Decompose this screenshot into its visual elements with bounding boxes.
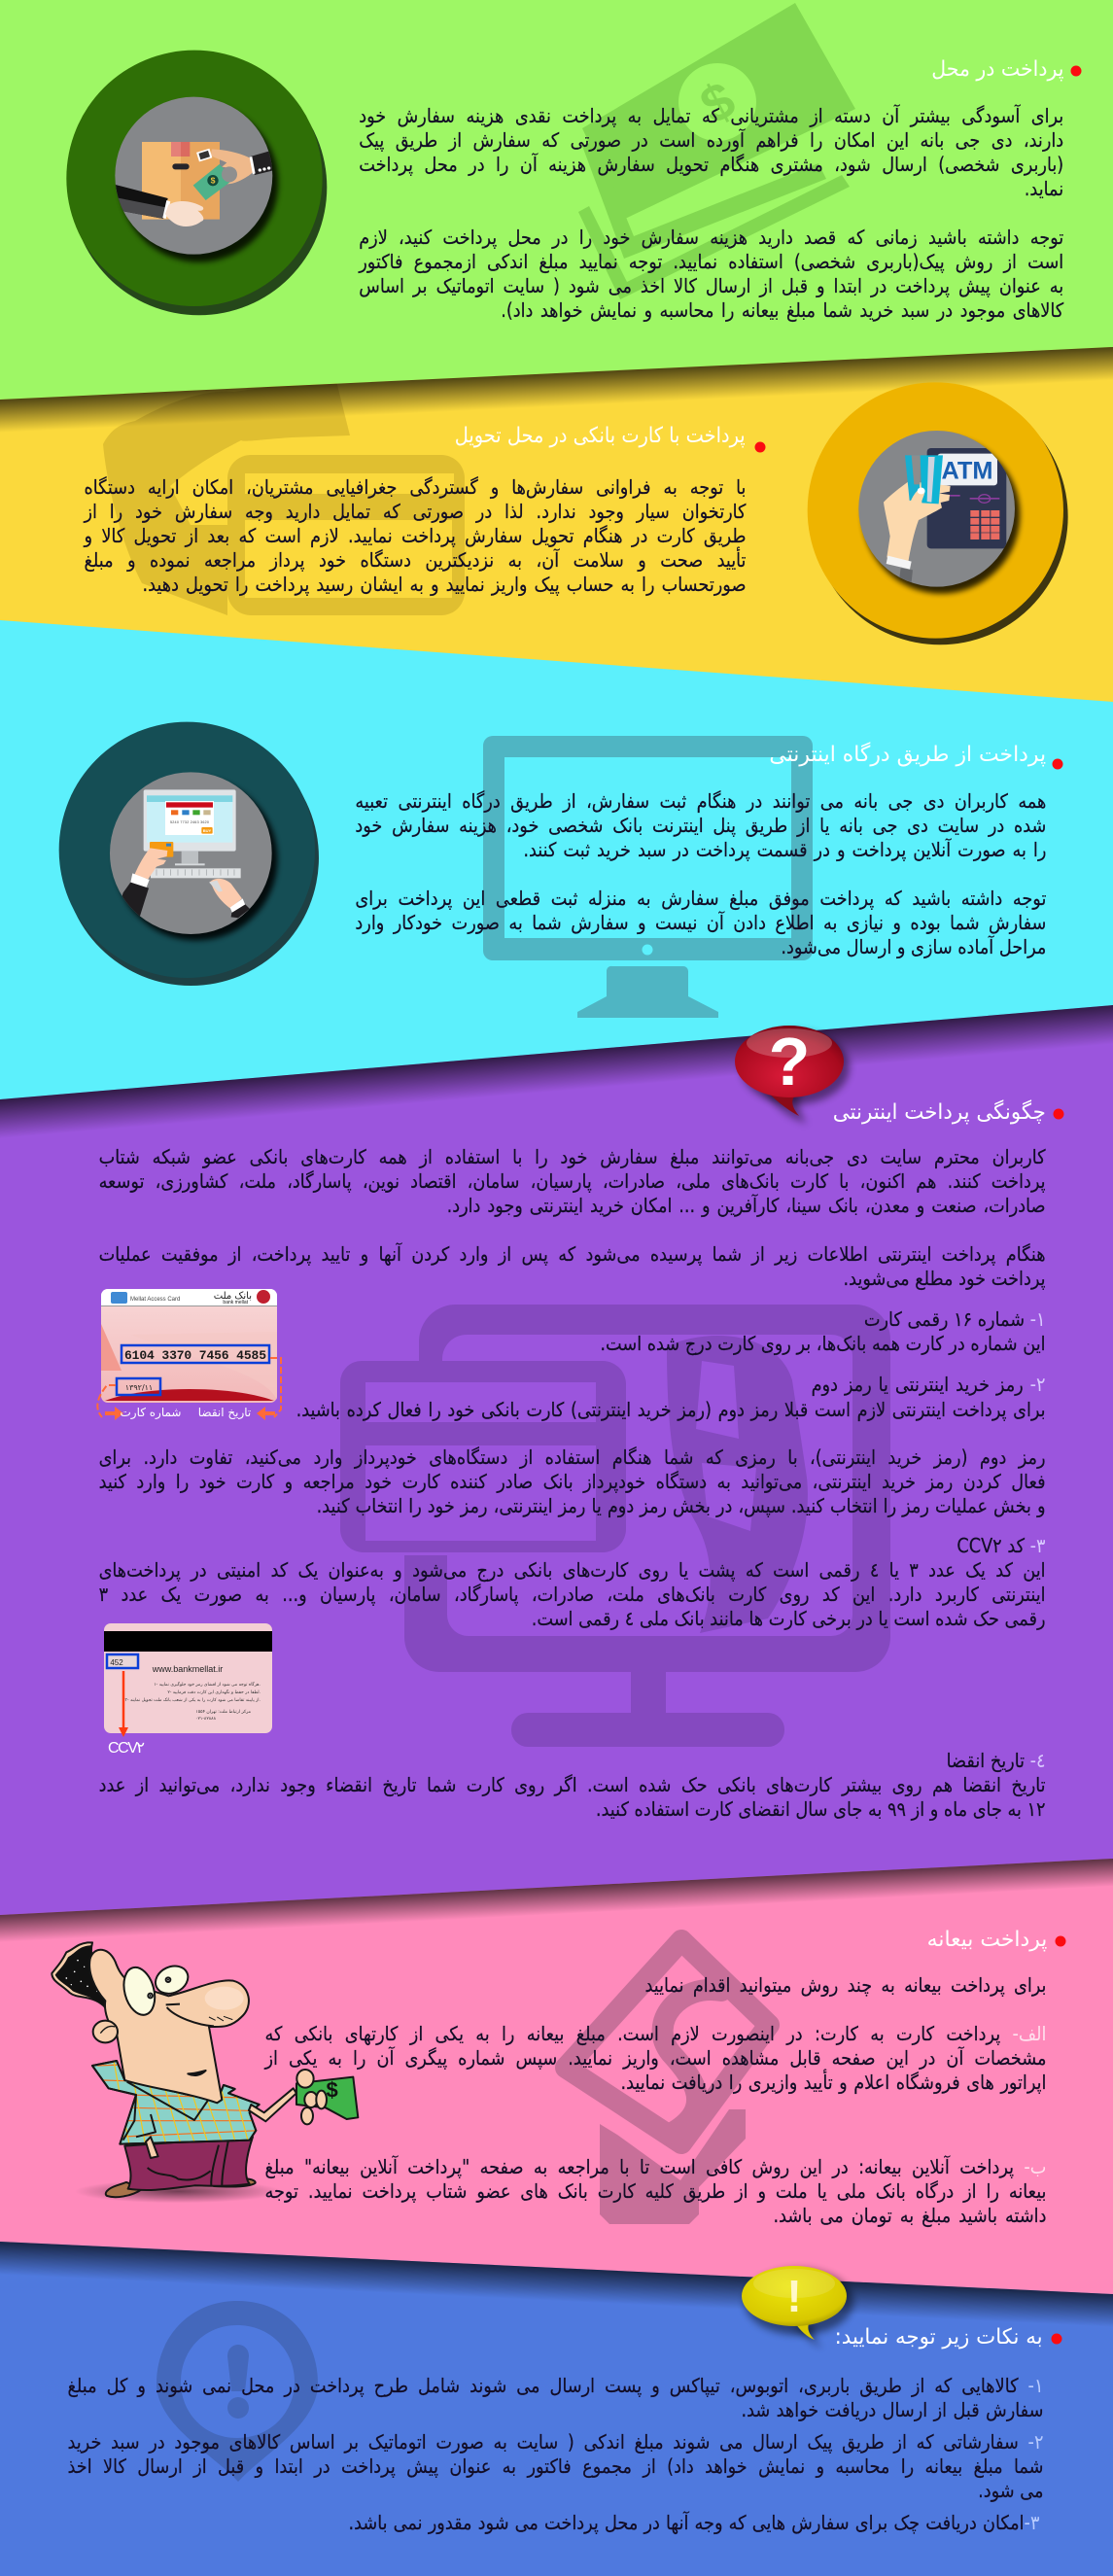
shadow from section above [0,1859,1113,1942]
image: bank card front: Mellat Access Card [130,1297,180,1303]
heading: چگونگی پرداخت اینترنتی [833,1100,1046,1125]
text block: information asked [99,1242,1046,1291]
watermark: hand holding card [103,377,465,615]
image: bank card back: 452 [110,1658,123,1667]
text block: تأیید صحت و سلامت آن، به نزدیکترین دستگاه خود پرداز مراجعه نموده و مبلغ [84,548,746,572]
red bullet [1052,758,1063,770]
text block: intro: دارند، دی جی بانه این امکان را فراهم آورده است در صورتی که سفارش از طریق پیک [359,128,1063,152]
note 1 [67,2374,1043,2422]
icon: delivery payment circle [66,51,327,315]
image: bank card front: شماره کارت [120,1406,182,1420]
red bullet [1071,66,1081,76]
note 2: می شود. [978,2479,1043,2502]
item 3: CCV2 [99,1534,1046,1631]
image: bank card back: ۰۲۱-۸۲۸۸۸ [195,1717,217,1722]
image: bank card back: CCV۲ [108,1740,145,1757]
panel: payment on delivery [0,0,1113,400]
image: bank card back: ۱- هرگاه توجه می شود از افشای رمز خود جلوگیری نمایید. [154,1681,261,1688]
text block: note: کالاهای موجود در سبد خرید شما مبلغ بیعانه را محاسبه و نمایش خواهد داد). [501,297,1063,321]
image: bank card front: بانک ملت [214,1291,252,1302]
yellow background [0,347,1113,703]
text block: note [355,887,1046,958]
item 2: second password: برای پرداخت اینترنتی لازم است قبلا رمز دوم (رمز خرید اینترنتی) کارت بانکی خود را فعال کرده باشید. [296,1398,1046,1421]
text block: option B: داشته باشید مبلغ به تومان می باشد. [773,2203,1046,2226]
text block: information asked: پرداخت خود مطلع می‌شوید. [844,1266,1046,1289]
image: bank card back: www.bankmellat.ir [152,1664,223,1674]
text block: second password details: و بخش عملیات رمز را انتخاب کنید. سپس، در بخش رمز دوم یا رمز اینترنتی، رمز خود را انتخاب کنید. [317,1493,1046,1516]
text block: intro: صادرات، صنعت و معدن، بانک سینا، کارآفرین و ... امکان خرید اینترنتی وجود دارد. [447,1194,1046,1217]
text block: option B [264,2154,1046,2228]
note 3: ۳-امکان دریافت چک برای سفارش هایی که وجه آنها در محل پرداخت می شود مقدور نمی باشد. [348,2510,1039,2533]
text block: option A [264,2022,1046,2094]
text block: intro: شده در سایت دی جی بانه یا از طریق پنل اینترنت بانک شخصی خود، هزینه سفارش خود [355,813,1046,836]
heading: به نکات زیر توجه نمایید: [835,2325,1043,2350]
text block: note: مراحل آماده سازی و ارسال می‌شود. [781,935,1046,958]
text block: intro: همه کاربران دی جی بانه می توانند در هنگام ثبت سفارش، از طریق درگاه اینترنتی تعبیه [355,789,1046,813]
text block: option B: بیعانه را از درگاه بانک ملی یا ملت و از طریق کلیه کارت بانک های عضو شتاب پرداخت نمایید. توجه [264,2179,1046,2203]
shadow from section above [0,2242,1113,2327]
panel: card payment on delivery [0,347,1113,702]
shadow from section above [0,347,1113,434]
watermark: monitor [483,736,813,1018]
text block: option A: اپراتور های فروشگاه اعلام و تأیید وازیری را دریافت نمایید. [620,2071,1046,2094]
text block: intro [99,1145,1046,1217]
illustration: cartoon man holding money [52,1942,358,2203]
text block: intro: کاربران محترم سایت دی جی‌بانه می‌توانند مبلغ سفارش خود را با استفاده از همه کارت‌های بانکی عضو شبکه شتاب [99,1145,1046,1168]
panel: internet gateway payment [0,620,1113,1099]
icon: delivery payment circle: $ [211,176,216,186]
text block: note [358,226,1063,323]
text block: information asked: هنگام پرداخت اینترنتی اطلاعات زیر از شما پرسیده می‌شود که پس از وارد کردن آنها و تایید پرداخت، از موفقیت عملیات [99,1242,1046,1266]
image: bank card front [97,1289,281,1420]
item 3: CCV2: ۳- کد CCV۲ [957,1534,1046,1557]
item 1: card number [601,1306,1046,1355]
icon: online shopping circle [59,722,319,986]
note 2 [67,2430,1043,2502]
item 3: CCV2: رقمی حک شده است یا در برخی کارت ها مانند بانک ملی ٤ رقمی است. [532,1606,1046,1629]
item 4: expiry date: ٤- تاریخ انقضا [947,1748,1046,1771]
text block [84,474,747,597]
watermark: monitor with card and hand [340,1305,890,1747]
panel: notes [0,2242,1113,2576]
text block: note: توجه داشته باشید زمانی که قصد دارید هزینه سفارش خود را در محل پرداخت کنید، لازم [359,226,1063,249]
icon: question bubble [735,1024,850,1124]
text block: second password details: فعال کردن رمز خرید اینترنتی، می‌توانید به دستگاه خودپرداز بانک صادر کننده کارت خود مراجعه و کارت خود را وارد کنید [99,1470,1046,1493]
icon: ATM circle [808,382,1068,644]
text block: note: توجه داشته باشید که پرداخت موفق مبلغ سفارش به منزله ثبت قطعی این پرداخت برای [355,887,1046,910]
text block: کارتخوان سیار وجود ندارد. لذا در صورتی که تمایل دارید وجه سفارش خود را از [84,500,746,523]
text block: note: به عنوان پیش پرداخت در ابتدا و قبل از ارسال کالا اخذ می شود ( سایت اتوماتیک بر اساس [359,274,1063,297]
illustration: cartoon man holding money: $ [327,2078,338,2103]
text block: intro [359,103,1063,200]
text block: option B: ب- پرداخت آنلاین بیعانه: در این روش کافی است تا با مراجعه به صفحه "پرداخت آنلاین بیعانه" مبلغ [264,2154,1046,2177]
item 1: card number: ۱- شماره ۱۶ رقمی کارت [864,1306,1046,1330]
item 2: second password: ۲- رمز خرید اینترنتی یا رمز دوم [812,1373,1046,1396]
pink background [0,1859,1113,2295]
item 3: CCV2: این کد یک عدد ۳ یا ٤ رقمی است که پشت یا روی کارت‌های بانکی درج می‌شود و به‌عنوان یک کد امنیتی در پرداخت‌های [99,1557,1046,1581]
icon: exclamation bubble [742,2266,853,2349]
icon: online shopping circle: 5240 7732 2463 3620 [170,820,209,824]
watermark: hand with diamond [566,1940,769,2224]
heading: پرداخت از طریق درگاه اینترنتی [769,743,1046,767]
text block: note: است از روش پیک(باربری شخصی) استفاده نمایید. توجه نمایید مبلغ اندکی ازمجموع فاکتور [359,249,1063,272]
note 2: شما مبلغ بیعانه را محاسبه و نمایش خواهد داد) از مجموع فاکتور به عنوان پیش پرداخت در ابتدا و قبل از ارسال کالا اخذ [67,2454,1043,2477]
blue background [0,2242,1113,2576]
image: bank card back [104,1623,272,1757]
image: bank card front: تاریخ انقضا [198,1406,251,1420]
watermark: banknotes [578,3,855,299]
watermark: map pin with exclamation mark [157,2301,318,2482]
image: bank card back: مرکز ارتباط ملت: تهران ۱۵۵۴ [195,1709,252,1715]
item 3: CCV2: اینترنتی کاربرد دارد. این کد روی کارت بانک‌های ملت، صادرات، پاسارگاد، سامان، پارسیان و... به صورت یک عدد ۳ [99,1583,1046,1606]
panel: deposit payment [0,1859,1113,2294]
item 1: card number: این شماره در کارت همه بانک‌ها، بر روی کارت درج شده است. [601,1332,1046,1355]
icon: ATM circle: ATM [941,457,992,484]
image: bank card front: 6104 3370 7456 4585 [124,1348,266,1363]
red bullet [1054,1108,1063,1120]
text block: با توجه به فراوانی سفارش‌ها و گستردگی جغرافیایی مشتریان، امکان ارایه دستگاه [84,474,746,498]
red bullet [754,441,766,453]
red bullet [1052,2333,1061,2345]
text block: صورتحساب را به حساب پیک واریز نمایید و به ایشان رسید پرداخت را تحویل دهید. [142,572,746,595]
text block: intro: نماید. [1025,177,1063,200]
heading: پرداخت بیعانه [926,1928,1047,1952]
note 1: سفارش قبل از ارسال دریافت خواهد شد. [741,2397,1043,2420]
cyan background [0,620,1113,1100]
image: bank card front: bank mellat [223,1300,249,1305]
text block: second password details [99,1445,1046,1518]
note 2: ۲- سفارشاتی که از طریق پیک ارسال می شوند مبلغ اندکی ( سایت به صورت اتوماتیک بر اساس کالاهای موجود در سبد خرید [67,2430,1043,2454]
text block: second password details: رمز دوم (رمز خرید اینترنتی)، با رمزی که شما هنگام استفاده از دستگاه‌های خودپرداز وارد می‌کنید، تفاوت دارد. برای [99,1445,1046,1468]
text block: intro: پرداخت کنند. هم اکنون، با کارت بانک‌های ملی، صادرات، پارسیان، سامان، اقتصاد نوین، پاسارگاد، ملت، کشاورزی، توسعه [99,1168,1046,1192]
text block: intro: برای آسودگی بیشتر آن دسته از مشتریانی که تمایل به پرداخت نقدی هزینه سفارش خود [359,103,1063,126]
item 4: expiry date: تاریخ انقضا هم روی بیشتر کارت‌های بانکی حک شده است. اگر روی کارت شما تاریخ انقضاء وجود ندارد، می‌توانید از عدد [99,1773,1046,1796]
shadow from section above [0,1005,1113,1138]
icon: online shopping circle: BUY [203,828,212,833]
panel: how to pay online [0,1005,1113,1822]
icon: question bubble: ? [769,1024,810,1099]
item 4: expiry date [99,1748,1046,1822]
watermark: banknotes: $ [691,70,745,135]
text block: option A: الف- پرداخت کارت به کارت: در اینصورت لازم است. مبلغ بیعانه را به یکی از کارتهای بانکی که [264,2022,1046,2045]
purple background [0,1005,1113,1916]
text block: intro: (باربری شخصی) ارسال شود، مشتری هنگام تحویل سفارش هزینه آن را در محل پرداخت [359,152,1063,175]
item 2: second password [296,1373,1046,1421]
text block: intro [355,789,1046,861]
image: bank card front: ۱۳۹۲/۱۱ [125,1383,153,1392]
text block: lead: برای پرداخت بیعانه به چند روش میتوانید اقدام نمایید [644,1973,1046,1997]
note 1: ۱- کالاهایی که از طریق باربری، اتوبوس، تیپاکس و پست ارسال می شوند شامل طرح پرداخت در محل نمی شوند و کل مبلغ [67,2374,1043,2397]
text block: intro: را به صورت آنلاین پرداخت و در قسمت پرداخت در سبد خرید ثبت کنند. [523,838,1046,861]
heading: پرداخت با کارت بانکی در محل تحویل [455,424,746,448]
icon: exclamation bubble: ! [786,2271,802,2321]
green background [0,0,1113,400]
text block: طریق کارت در هنگام تحویل سفارش پرداخت نمایید. لازم است که بعد از تحویل کالا و [84,523,746,546]
red bullet [1056,1936,1065,1946]
image: bank card back: ۳- از پایبند تقاضا می شود کارت را به یکی از شعب بانک ملت تحویل نمایند. [124,1697,261,1703]
item 4: expiry date: ۱۲ به جای ماه و از ۹۹ به جای سال انقضای کارت استفاده کنید. [596,1796,1046,1820]
text block: option A: مشخصات آن در این صفحه قابل مشاهده است، واریز نمایید. سپس شماره پیگری آن را به یکی از [264,2045,1046,2069]
heading: پرداخت در محل [931,57,1063,82]
image: bank card back: ۲- لطفا در حفظ و نگهداری این کارت دقت فرمایید. [167,1688,261,1695]
text block: note: سفارش شما بوده و نیازی به اطلاع دادن آن نیست و سفارش شما به صورت خودکار وارد [355,910,1046,933]
